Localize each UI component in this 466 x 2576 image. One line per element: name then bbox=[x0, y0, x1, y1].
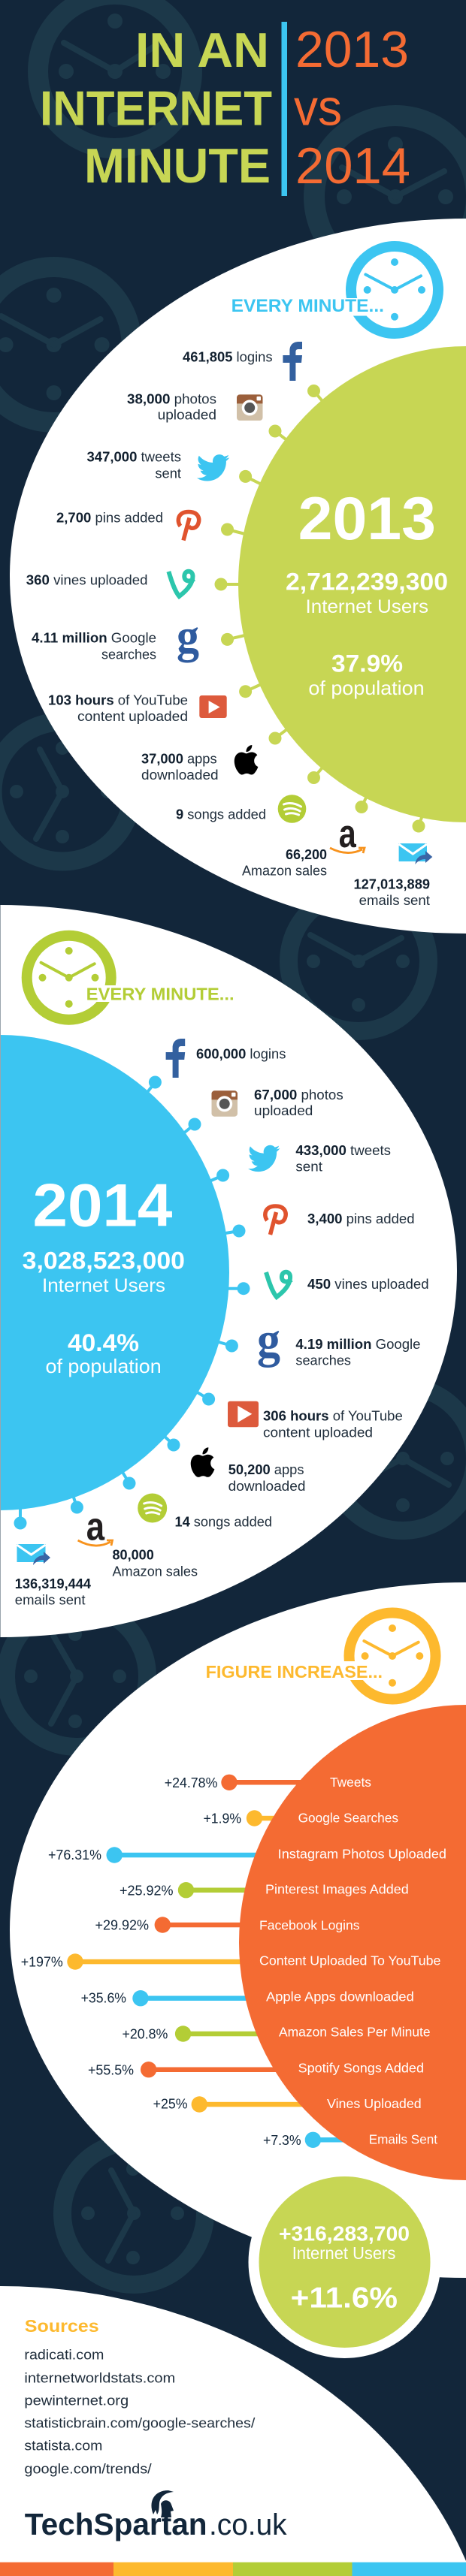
icon: amazon: a bbox=[86, 1505, 104, 1549]
increase labels: Google Searches bbox=[298, 1811, 398, 1826]
stat: pinterest 2013: 2,700 pins added bbox=[56, 510, 163, 526]
title left: in an internet minute: IN AN bbox=[135, 23, 269, 77]
panel 2014 white shape bbox=[0, 905, 457, 1637]
left edge line bbox=[0, 905, 1, 1637]
icon: amazon bbox=[78, 1505, 113, 1549]
connectors 2013 bbox=[215, 385, 425, 832]
stat: email 2014: emails sent bbox=[15, 1592, 85, 1608]
stat row: amazon sales: +20.8% bbox=[122, 2026, 168, 2041]
stat: twitter 2013 bbox=[87, 449, 229, 481]
circle: total increase: Internet Users bbox=[292, 2243, 395, 2263]
icon: vine bbox=[266, 1272, 292, 1297]
stat: pinterest 2014: 3,400 pins added bbox=[307, 1211, 415, 1226]
stat: facebook 2013 bbox=[183, 342, 302, 381]
footer colour bar bbox=[0, 2562, 466, 2576]
heading: figure increase: FIGURE INCREASE... bbox=[206, 1662, 383, 1682]
sources list: radicati.com bbox=[24, 2347, 104, 2363]
stat: twitter 2014 bbox=[248, 1142, 391, 1174]
stat: google 2014: searches bbox=[295, 1352, 351, 1368]
stat: instagram 2013: uploaded bbox=[158, 407, 216, 423]
increase labels: Vines Uploaded bbox=[327, 2096, 422, 2111]
year 2013 stats: 37.9% bbox=[331, 650, 403, 677]
stat: spotify 2014 bbox=[138, 1493, 272, 1529]
stat row: pinterest images bbox=[120, 1882, 299, 1898]
year 2014 stats: Internet Users bbox=[42, 1275, 165, 1296]
increase labels: Apple Apps downloaded bbox=[266, 1989, 414, 2004]
stat: youtube 2013 bbox=[48, 692, 227, 724]
watermark clock 3 bbox=[0, 267, 132, 422]
icon: email bbox=[399, 843, 432, 864]
stat: google 2013: searches bbox=[101, 646, 156, 662]
stat row: tweets bbox=[165, 1775, 361, 1790]
watermark clock 6 bbox=[331, 1386, 466, 1531]
stat: apple 2013: downloaded bbox=[141, 767, 219, 783]
stat row: emails sent: +7.3% bbox=[263, 2133, 301, 2148]
stat: youtube 2014 bbox=[228, 1401, 403, 1440]
stat: twitter 2013: sent bbox=[155, 465, 181, 481]
stat: google 2014 bbox=[257, 1312, 421, 1368]
stat: google 2013: 4.11 million Google bbox=[32, 630, 156, 646]
stat: spotify 2013: 9 songs added bbox=[176, 807, 266, 822]
sources list bbox=[24, 2347, 256, 2476]
sources list: statisticbrain.com/google-searches/ bbox=[24, 2415, 256, 2431]
watermark clock 8 bbox=[62, 2142, 205, 2285]
sources list: pewinternet.org bbox=[24, 2393, 129, 2409]
stat: email 2014: 136,319,444 bbox=[15, 1576, 92, 1591]
stat row: emails sent bbox=[263, 2132, 380, 2148]
sources list: statista.com bbox=[24, 2438, 102, 2454]
increase labels: Spotify Songs Added bbox=[298, 2060, 424, 2075]
stat: vine 2013: 360 vines uploaded bbox=[26, 572, 147, 588]
circle 2013 bbox=[238, 346, 466, 822]
icon: google g: g bbox=[257, 1312, 280, 1368]
icon: apple bbox=[235, 745, 258, 775]
icon: spartan helmet bbox=[151, 2490, 174, 2517]
title left: in an internet minute: MINUTE bbox=[84, 138, 271, 193]
stat: youtube 2014: 306 hours of YouTube bbox=[263, 1408, 403, 1424]
sources white shape bbox=[0, 2286, 466, 2576]
stat: instagram 2014: uploaded bbox=[254, 1102, 313, 1118]
panel: sources bbox=[0, 2286, 466, 2576]
stat: instagram 2014: 67,000 photos bbox=[254, 1087, 343, 1102]
stat: google 2013 bbox=[32, 609, 199, 663]
stat: email 2013 bbox=[353, 843, 432, 908]
stat row: apple apps bbox=[81, 1990, 291, 2006]
icon: twitter bbox=[248, 1145, 280, 1172]
clock icon 2014 bbox=[27, 936, 239, 1020]
icon: pinterest bbox=[178, 512, 199, 541]
icon: instagram bbox=[237, 394, 263, 421]
panel: 2013 bbox=[10, 219, 466, 934]
stat: facebook 2013: 461,805 logins bbox=[183, 348, 273, 364]
stat row: facebook logins: +29.92% bbox=[95, 1917, 149, 1932]
title bbox=[40, 21, 410, 196]
icon: amazon: a bbox=[339, 812, 356, 856]
title left: in an internet minute bbox=[40, 23, 272, 193]
stat: amazon 2013: 66,200 bbox=[286, 846, 327, 862]
icon: spotify bbox=[278, 795, 306, 823]
stat: pinterest 2013 bbox=[56, 510, 199, 541]
stat: apple 2013 bbox=[141, 745, 258, 783]
icon: email bbox=[17, 1544, 50, 1565]
title right: 2013 vs 2014: 2013 bbox=[295, 21, 409, 78]
stat row: youtube content bbox=[21, 1953, 286, 1970]
stat: twitter 2013: 347,000 tweets bbox=[87, 449, 181, 464]
stat row: amazon sales bbox=[122, 2026, 304, 2042]
connectors 2014 bbox=[14, 1075, 250, 1529]
year 2014 stats bbox=[23, 1172, 185, 1377]
icon: vine bbox=[168, 572, 194, 596]
stat row: facebook logins bbox=[95, 1917, 290, 1933]
increase labels: Tweets bbox=[330, 1775, 371, 1790]
stat: instagram 2013: 38,000 photos bbox=[127, 391, 216, 407]
watermark clock 5 bbox=[289, 891, 428, 1031]
year 2013 stats: Internet Users bbox=[305, 596, 428, 617]
stat: facebook 2014: 600,000 logins bbox=[196, 1045, 286, 1061]
title right: 2013 vs 2014: vs bbox=[294, 80, 342, 137]
heading: every minute 2013: EVERY MINUTE... bbox=[231, 296, 384, 316]
icon: youtube bbox=[228, 1401, 259, 1427]
watermark clock 7 bbox=[6, 1606, 147, 1747]
icon: pinterest bbox=[265, 1206, 286, 1235]
stat row: vines uploaded bbox=[153, 2096, 342, 2113]
increase labels: Amazon Sales Per Minute bbox=[279, 2025, 431, 2040]
year 2014 stats: 2014 bbox=[33, 1172, 172, 1239]
stat row: pinterest images: +25.92% bbox=[120, 1883, 173, 1898]
circle: total increase: +316,283,700 bbox=[279, 2222, 410, 2245]
stat: amazon 2014 bbox=[78, 1505, 198, 1579]
title left: in an internet minute: INTERNET bbox=[40, 81, 272, 135]
stat row: spotify songs: +55.5% bbox=[88, 2063, 134, 2078]
stat: apple 2014 bbox=[191, 1447, 306, 1494]
circle: total increase bbox=[248, 2166, 440, 2358]
increase labels: Facebook Logins bbox=[259, 1917, 360, 1932]
logo: techspartan: .co.uk bbox=[209, 2508, 288, 2541]
panel increase white shape bbox=[10, 1582, 466, 2278]
icon: apple bbox=[191, 1447, 214, 1477]
sources list: internetworldstats.com bbox=[24, 2369, 175, 2385]
stat: youtube 2013: content uploaded bbox=[77, 708, 188, 724]
stat row: google searches bbox=[203, 1810, 329, 1826]
sources list: google.com/trends/ bbox=[24, 2460, 153, 2476]
year 2013 stats: of population bbox=[308, 677, 425, 699]
logo: techspartan bbox=[25, 2490, 288, 2541]
stat: amazon 2014: Amazon sales bbox=[113, 1563, 198, 1579]
increase labels: Instagram Photos Uploaded bbox=[278, 1846, 446, 1861]
panel 2013 white shape bbox=[10, 219, 466, 934]
watermark clock 4 bbox=[0, 722, 132, 861]
stat row: instagram photos: +76.31% bbox=[48, 1848, 101, 1863]
stat: amazon 2013 bbox=[242, 812, 365, 879]
logo: techspartan: TechSpartan bbox=[25, 2507, 207, 2541]
stat row: spotify songs bbox=[88, 2062, 314, 2078]
icon: youtube bbox=[199, 695, 227, 718]
year 2014 stats: of population bbox=[45, 1355, 162, 1377]
title right: 2013 vs 2014 bbox=[294, 21, 410, 195]
watermark clock 2 bbox=[314, 116, 466, 278]
stat: instagram 2013 bbox=[127, 391, 263, 423]
stat: spotify 2014: 14 songs added bbox=[174, 1513, 272, 1529]
year 2013 stats bbox=[286, 485, 448, 699]
watermark clock 1 bbox=[38, 0, 192, 149]
stat: twitter 2014: sent bbox=[295, 1158, 322, 1174]
stat: vine 2014 bbox=[266, 1272, 429, 1297]
icon: twitter bbox=[197, 454, 229, 481]
stat: twitter 2014: 433,000 tweets bbox=[295, 1142, 391, 1158]
increase labels: Pinterest Images Added bbox=[265, 1882, 409, 1897]
increase labels: Emails Sent bbox=[369, 2131, 437, 2146]
icon: spotify bbox=[138, 1493, 167, 1523]
year 2014 stats: 40.4% bbox=[68, 1329, 139, 1356]
clock icon 2013 bbox=[225, 246, 438, 333]
stat: email 2014 bbox=[15, 1544, 92, 1608]
stat: youtube 2013: 103 hours of YouTube bbox=[48, 692, 188, 708]
increase labels bbox=[259, 1775, 446, 2146]
stat row: vines uploaded: +25% bbox=[153, 2097, 188, 2112]
icon: instagram bbox=[212, 1090, 238, 1117]
icon: google g: g bbox=[177, 609, 199, 663]
icon: amazon bbox=[330, 812, 365, 856]
stat: google 2014: 4.19 million Google bbox=[295, 1336, 421, 1352]
title divider bbox=[281, 22, 287, 196]
increase labels: Content Uploaded To YouTube bbox=[259, 1953, 440, 1968]
stat: amazon 2013: Amazon sales bbox=[242, 863, 327, 879]
stat row: youtube content: +197% bbox=[21, 1954, 63, 1969]
year 2013 stats: 2013 bbox=[298, 485, 436, 553]
stat: vine 2014: 450 vines uploaded bbox=[307, 1276, 429, 1292]
year 2014 stats: 3,028,523,000 bbox=[23, 1247, 185, 1274]
heading: every minute 2014: EVERY MINUTE... bbox=[86, 985, 235, 1004]
icon: facebook bbox=[283, 342, 302, 381]
clock icon increase bbox=[203, 1613, 436, 1699]
year 2013 stats: 2,712,239,300 bbox=[286, 569, 448, 596]
circle: total increase: +11.6% bbox=[291, 2282, 398, 2315]
sources heading: Sources bbox=[25, 2316, 99, 2336]
stat: facebook 2014 bbox=[166, 1039, 286, 1078]
stat row: tweets: +24.78% bbox=[165, 1775, 217, 1790]
stat row: instagram photos bbox=[48, 1847, 302, 1863]
title right: 2013 vs 2014: 2014 bbox=[295, 137, 410, 195]
stat: email 2013: emails sent bbox=[359, 892, 430, 908]
stat row: apple apps: +35.6% bbox=[81, 1991, 126, 2006]
panel: 2014 bbox=[0, 905, 457, 1637]
stat: amazon 2014: 80,000 bbox=[113, 1547, 154, 1563]
orange circle bbox=[239, 1705, 466, 2180]
panel: figure increase bbox=[10, 1582, 466, 2278]
stat: youtube 2014: content uploaded bbox=[263, 1424, 373, 1440]
stat: apple 2013: 37,000 apps bbox=[141, 750, 217, 766]
icon: facebook bbox=[166, 1039, 185, 1078]
stat: email 2013: 127,013,889 bbox=[353, 876, 430, 892]
stat: pinterest 2014 bbox=[265, 1206, 415, 1235]
stat: apple 2014: downloaded bbox=[228, 1478, 306, 1494]
stat: instagram 2014 bbox=[212, 1087, 343, 1118]
stat: spotify 2013 bbox=[176, 795, 306, 823]
circle 2014 bbox=[0, 1035, 229, 1510]
stat: vine 2013 bbox=[26, 572, 194, 596]
stat: apple 2014: 50,200 apps bbox=[228, 1461, 304, 1477]
stat row: google searches: +1.9% bbox=[203, 1811, 241, 1826]
